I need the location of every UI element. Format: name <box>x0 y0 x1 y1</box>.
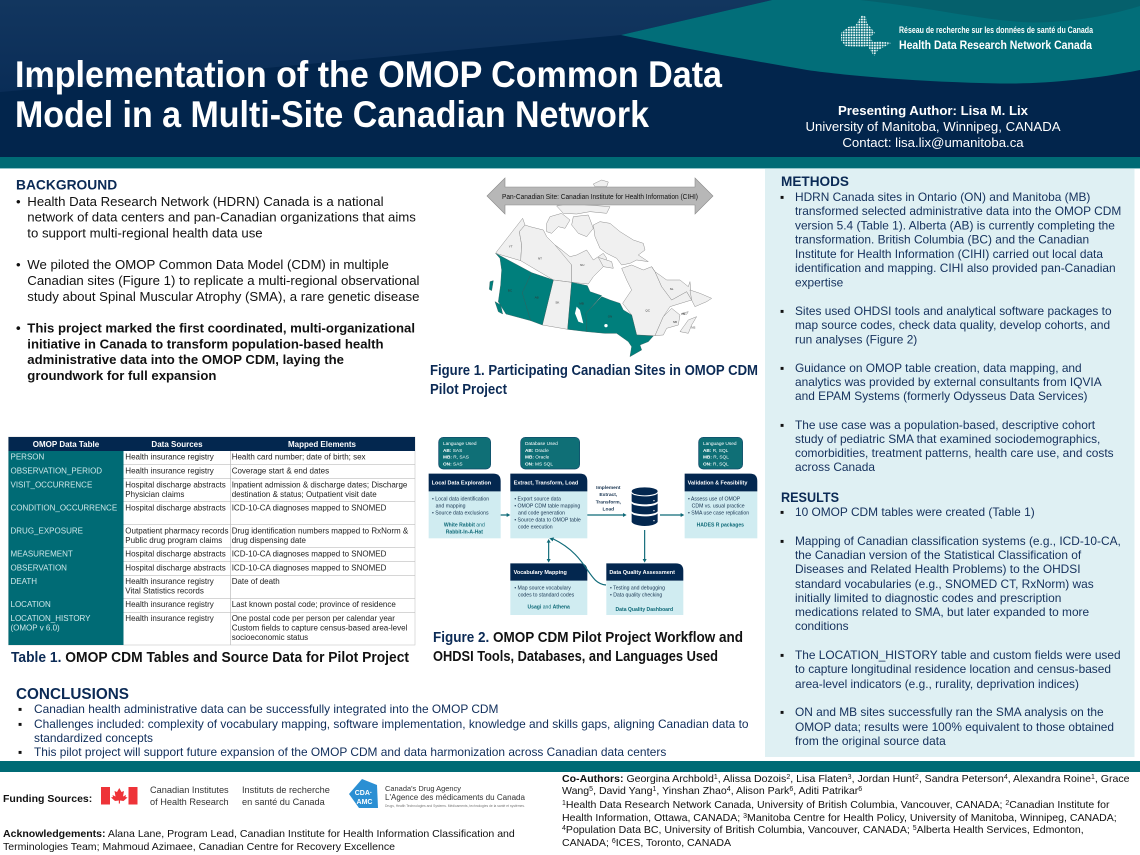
co-authors: , David Yang <box>593 785 653 797</box>
table 1: destination & status; Outpatient visit date <box>232 490 377 499</box>
panel: background <box>16 178 420 383</box>
figure 2: workflow: and code generation <box>518 510 565 516</box>
figure 2: workflow: Data Quality Assessment <box>609 570 675 576</box>
table 1: LOCATION_HISTORY <box>10 614 91 623</box>
figure 2: workflow: Language Used <box>703 441 737 447</box>
funding sources: Instituts de recherche <box>242 785 330 795</box>
table 1: One postal code per person per calendar year <box>232 614 395 623</box>
figure 1: map of Canada: SK <box>555 300 559 304</box>
panel: methods and results: initially limited to diagnostic codes and prescription <box>795 591 1061 605</box>
funding sources: of Health Research <box>150 797 229 807</box>
co-authors: 4 <box>562 825 566 832</box>
table 1: Last known postal code; province of residence <box>232 600 396 609</box>
panel: background: • <box>16 257 21 272</box>
figure 1: map of Canada: NB <box>673 320 677 324</box>
panel: methods and results: OMOP data; results were 100% equivalent to those obtained <box>795 720 1114 734</box>
co-authors: CANADA; <box>562 837 609 849</box>
figure 2: workflow: Database Used <box>525 441 558 447</box>
figure 1: map of Canada: BC <box>508 289 513 293</box>
presenting author: Contact: lisa.lix@umanitoba.ca <box>842 135 1024 150</box>
table 1: VISIT_OCCURRENCE <box>10 480 92 490</box>
panel: methods and results: study of pediatric SMA that examined sociodemographics, <box>795 432 1100 446</box>
table 1: Public drug program claims <box>125 536 222 545</box>
table 1: PERSON <box>10 452 45 462</box>
co-authors: 3 <box>743 813 747 820</box>
panel: methods and results: transformation. British Columbia (BC) and the Canadian <box>795 232 1089 246</box>
figure 2: workflow: Rabbit-In-A-Hat <box>446 529 483 535</box>
panel: methods and results: version 5.4 (Table 1). Alberta (AB) is currently completing the <box>795 218 1115 232</box>
funding sources: Canadian Institutes <box>150 785 229 795</box>
funding sources: Canada's Drug Agency <box>385 784 461 793</box>
co-authors: 5 <box>913 825 917 832</box>
panel: methods and results: The LOCATION_HISTORY table and custom fields were used <box>795 648 1121 662</box>
figure 2: workflow: AB: SAS <box>443 448 462 454</box>
panel: methods and results: Institute for Health Information (CIHI) carried out local data <box>795 247 1103 261</box>
table 1: OBSERVATION_PERIOD <box>10 466 102 476</box>
panel: methods and results: run analyses (Figure 2) <box>795 332 917 346</box>
table 1: socioeconomic status <box>232 633 308 642</box>
table 1 caption: Table 1. OMOP CDM Tables and Source Data for Pilot Project <box>11 649 409 666</box>
co-authors: 1 <box>562 800 566 807</box>
figure 2: workflow: Language Used <box>443 441 477 447</box>
funding sources: L'Agence des médicaments du Canada <box>385 793 526 802</box>
co-authors: , Alexandra Roine <box>1008 773 1091 785</box>
co-authors: 4 <box>727 786 731 793</box>
arrow: pan-Canadian site <box>487 178 713 214</box>
table 1: LOCATION <box>10 600 51 609</box>
figure 2: workflow: • Source data to OMOP table <box>514 517 581 523</box>
acknowledgements <box>3 828 515 853</box>
panel: background: groundwork for full expansion <box>27 368 216 383</box>
table 1: Physician claims <box>125 490 184 499</box>
panel: methods and results: comorbidities, treatment patterns, health care use, and costs <box>795 446 1114 460</box>
panel: methods and results: to capture longitudinal residence location and census-based <box>795 662 1111 676</box>
figure 2: workflow: • Source data exclusions <box>432 510 489 516</box>
panel: methods and results <box>765 169 1134 757</box>
panel: methods and results: RESULTS <box>781 489 839 505</box>
figure 2: workflow: • Data quality checking <box>610 593 662 599</box>
funding sources: Funding Sources: <box>3 793 92 805</box>
figure 2: workflow: Vocabulary Mapping <box>514 570 567 576</box>
figure 2: workflow: ON: MS SQL <box>525 461 553 467</box>
panel: background: network of data centers and pan-Canadian organizations that aims <box>27 210 416 225</box>
figure 1: map of Canada: NL <box>670 287 674 291</box>
figure 2: workflow: Usagi and Athena <box>527 605 570 611</box>
figure 1: map of Canada: NS <box>691 325 695 329</box>
panel: methods and results: conditions <box>795 619 849 633</box>
table 1: Hospital discharge abstracts <box>125 550 226 558</box>
co-authors: , Sandra Peterson <box>919 773 1004 785</box>
panel: methods and results: ▪ <box>780 418 784 432</box>
table 1: Health insurance registry <box>125 577 214 586</box>
table 1: Hospital discharge abstracts <box>125 504 226 512</box>
co-authors: 2 <box>915 774 919 781</box>
funding sources: Drugs, Health Technologies and Systems. Médicaments, technologies de la santé et systèmes. <box>385 804 525 808</box>
panel: methods and results: map source codes, check data quality, develop cohorts, and <box>795 318 1110 332</box>
header banner <box>0 0 1140 169</box>
panel: background: administrative data into the OMOP CDM, laying the <box>27 352 344 367</box>
presenting author <box>805 103 1061 150</box>
figure 1: map of Canada: MB <box>579 301 584 305</box>
panel: background: Health Data Research Network (HDRN) Canada is a national <box>27 194 384 209</box>
panel: conclusions: ▪ <box>18 745 22 759</box>
figure 2: workflow: ON: R, SQL <box>703 461 729 467</box>
figure 2: workflow: AB: Oracle <box>525 448 549 454</box>
panel: background: to support multi-regional health data use <box>27 226 263 241</box>
figure 2: workflow: Local Data Exploration <box>432 481 492 487</box>
table 1: DEATH <box>10 577 37 586</box>
table 1: Data Sources <box>151 440 203 449</box>
panel: methods and results: and EPAM Systems (formerly Odysseus Data Services) <box>795 389 1088 403</box>
figure 1 caption <box>430 362 758 398</box>
panel: methods and results: Sites used OHDSI tools and analytical software packages to <box>795 304 1112 318</box>
figure 2: workflow: HADES R packages <box>697 522 744 528</box>
figure 2 caption: OHDSI Tools, Databases, and Languages Used <box>433 648 718 665</box>
co-authors: 1 <box>714 774 718 781</box>
title: Model in a Multi-Site Canadian Network <box>15 94 649 135</box>
figure 1: map of Canada: NU <box>580 263 584 267</box>
panel: background: BACKGROUND <box>16 178 117 192</box>
panel: methods and results: ▪ <box>780 190 784 204</box>
co-authors: 3 <box>848 774 852 781</box>
icon: Canadian flag <box>101 787 138 804</box>
co-authors: , Jordan Hunt <box>852 773 915 785</box>
acknowledgements: Acknowledgements: Alana Lane, Program Lead, Canadian Institute for Health Information Classification and <box>3 828 515 840</box>
figure 2: workflow: • Assess use of OMOP <box>688 496 741 502</box>
figure 1: map of Canada: NT <box>538 256 542 260</box>
panel: conclusions: standardized concepts <box>34 731 153 745</box>
co-authors: , Yinshan Zhao <box>656 785 727 797</box>
co-authors: Co-Authors: Georgina Archbold <box>562 773 714 785</box>
figure 1: map of Canada: QC <box>645 308 651 312</box>
co-authors: 4 <box>1004 774 1008 781</box>
table 1: Inpatient admission & discharge dates; Discharge <box>232 480 408 490</box>
table 1: Custom fields to capture census-based area-level <box>232 624 408 632</box>
panel: background: initiative in Canada to transform population-based health <box>27 336 384 352</box>
co-authors <box>562 773 1130 849</box>
co-authors: , Aditi Patrikar <box>793 785 859 797</box>
panel: methods and results: ▪ <box>780 505 784 519</box>
table 1: ICD-10-CA diagnoses mapped to SNOMED <box>232 564 387 572</box>
table 1: Health card number; date of birth; sex <box>232 452 366 462</box>
funding sources <box>3 779 526 808</box>
table 1: DRUG_EXPOSURE <box>10 526 83 536</box>
panel: methods and results: across Canada <box>795 460 875 474</box>
panel: background: This project marked the first coordinated, multi-organizational <box>27 321 415 336</box>
table 1: Outpatient pharmacy records <box>125 526 228 536</box>
figure 2: workflow: code execution <box>518 524 553 530</box>
presenting author: University of Manitoba, Winnipeg, CANADA <box>805 119 1061 134</box>
table 1: Health insurance registry <box>125 452 214 462</box>
table 1: Mapped Elements <box>288 440 357 449</box>
funding sources: en santé du Canada <box>242 797 326 807</box>
co-authors: ICES, Toronto, CANADA <box>616 837 732 849</box>
panel: conclusions: Canadian health administrative data can be successfully integrated into the OMOP CDM <box>34 702 498 716</box>
co-authors: 6 <box>612 838 616 845</box>
figure 2: workflow: Data Quality Dashboard <box>616 607 673 613</box>
co-authors: , Alissa Dozois <box>718 773 786 785</box>
table 1: Health insurance registry <box>125 614 214 623</box>
table 1: MEASUREMENT <box>10 550 73 558</box>
table 1: Hospital discharge abstracts <box>125 480 226 490</box>
figure 1: map of Canada: ON <box>608 315 612 319</box>
co-authors: Health Information, Ottawa, CANADA; <box>562 812 740 824</box>
presenting author: Presenting Author: Lisa M. Lix <box>838 103 1029 118</box>
panel: methods and results: ▪ <box>780 304 784 318</box>
panel: methods and results: ▪ <box>780 648 784 662</box>
footer band <box>0 761 1140 772</box>
panel: methods and results: identification and mapping. CIHI also provided pan-Canadian <box>795 261 1116 275</box>
figure 2: workflow: ON: SAS <box>443 461 463 467</box>
panel: methods and results: from the original source data <box>795 734 946 748</box>
icon: CDA-AMC logo: CDA· <box>355 790 372 797</box>
panel: conclusions: ▪ <box>18 702 22 716</box>
table 1: Health insurance registry <box>125 466 214 476</box>
panel: methods and results: the Canadian version of the Statistical Classification of <box>795 548 1082 562</box>
table 1: Hospital discharge abstracts <box>125 564 226 572</box>
figure 2: workflow: • SMA use case replication <box>688 510 749 516</box>
figure 1: map of Canada: PE <box>681 312 685 316</box>
figure 2: workflow: • Testing and debugging <box>610 586 665 592</box>
title <box>15 54 722 135</box>
acknowledgements: Terminologies Team; Mahmoud Azimaee, Canadian Centre for Recovery Excellence <box>3 841 395 853</box>
panel: methods and results: Mapping of Canadian classification systems (e.g., ICD-10-CA, <box>795 534 1121 548</box>
panel: methods and results: ON and MB sites successfully ran the SMA analysis on the <box>795 705 1104 719</box>
co-authors: 1 <box>1091 774 1095 781</box>
panel: methods and results: Guidance on OMOP table creation, data mapping, and <box>795 361 1082 375</box>
figure 2: workflow: White Rabbit and <box>444 522 485 528</box>
co-authors: 6 <box>858 786 862 793</box>
co-authors: Canadian Institute for <box>1009 799 1110 811</box>
co-authors: 6 <box>789 786 793 793</box>
table 1: Health insurance registry <box>125 600 214 609</box>
co-authors: Manitoba Centre for Health Policy, University of Manitoba, Winnipeg, CANADA; <box>747 812 1117 824</box>
figure 2: workflow: Validation & Feasibility <box>688 481 748 487</box>
panel: methods and results: 10 OMOP CDM tables were created (Table 1) <box>795 505 1035 519</box>
figure 1: map of Canada: AB <box>535 296 539 300</box>
logo: Health Data Research Network Canada: Health Data Research Network Canada <box>899 40 1093 52</box>
table 1: ICD-10-CA diagnoses mapped to SNOMED <box>232 504 387 512</box>
figure 2: workflow: codes to standard codes <box>518 593 575 599</box>
figure 2: workflow: CDM vs. usual practice <box>692 503 745 509</box>
co-authors: , Grace <box>1095 773 1130 785</box>
table 1: Drug identification numbers mapped to RxNorm & <box>232 526 409 536</box>
panel: methods and results: expertise <box>795 276 844 290</box>
figure 2: workflow: MB: Oracle <box>525 455 550 461</box>
panel: methods and results: medications related to SMA, but later expanded to more <box>795 605 1090 619</box>
figure 2: workflow: MB: R, SAS <box>443 455 469 461</box>
co-authors: Population Data BC, University of British Columbia, Vancouver, CANADA; <box>566 824 913 836</box>
table 1: OBSERVATION <box>10 564 67 572</box>
panel: conclusions: ▪ <box>18 717 22 731</box>
figure 2: workflow: AB: R, SQL <box>703 448 729 454</box>
panel: background: Canadian sites (Figure 1) to replicate a multi-regional observational <box>27 273 420 288</box>
icon: CDA-AMC logo <box>349 779 378 808</box>
panel: conclusions: CONCLUSIONS <box>16 686 129 703</box>
panel: methods and results: The use case was a population-based, descriptive cohort <box>795 418 1096 432</box>
panel: methods and results: area-level indicators (e.g., rurality, deprivation indices) <box>795 677 1079 691</box>
figure 2: workflow: Extract, Transform, Load <box>514 481 578 487</box>
panel: methods and results: METHODS <box>781 173 849 189</box>
panel: background: study about Spinal Muscular Atrophy (SMA), a rare genetic disease <box>27 289 419 304</box>
panel: background: • <box>16 194 21 209</box>
figure 2: workflow: and mapping <box>436 503 466 509</box>
figure 2: workflow: Load <box>602 506 614 512</box>
panel: methods and results: transformed selected administrative data into the OMOP CDM <box>795 204 1121 218</box>
panel: methods and results: ▪ <box>780 534 784 548</box>
co-authors: 2 <box>786 774 790 781</box>
figure 1: map of Canada: YT <box>509 245 513 249</box>
co-authors: Wang <box>562 785 589 797</box>
arrows <box>501 513 684 585</box>
panel: conclusions: Challenges included: complexity of vocabulary mapping, software implementation, knowledge and skills gaps, aligning Canadian data to <box>34 717 749 731</box>
panel: background: We piloted the OMOP Common Data Model (CDM) in multiple <box>27 257 389 272</box>
figure 2: workflow: Transform, <box>596 499 622 505</box>
panel: methods and results: HDRN Canada sites in Ontario (ON) and Manitoba (MB) <box>795 190 1090 204</box>
table 1: Vital Statistics records <box>125 586 204 596</box>
panel: methods and results: Diseases and Related Health Problems) to the OHDSI <box>795 562 1081 576</box>
co-authors: 5 <box>589 786 593 793</box>
co-authors: , Alison Park <box>731 785 790 797</box>
co-authors: 2 <box>1005 800 1009 807</box>
table 1: ICD-10-CA diagnoses mapped to SNOMED <box>232 550 387 558</box>
figure 2: workflow <box>429 437 757 615</box>
figure 2: workflow: Extract, <box>599 492 618 498</box>
table 1: OMOP Data Table <box>33 440 100 449</box>
co-authors: 1 <box>652 786 656 793</box>
panel: methods and results: ▪ <box>780 361 784 375</box>
arrow: pan-Canadian site: Pan-Canadian Site: Canadian Institute for Health Information (CIHI) <box>502 194 698 201</box>
logo: Health Data Research Network Canada <box>841 15 1094 56</box>
table 1: Date of death <box>232 577 280 586</box>
table 1: Coverage start & end dates <box>232 466 329 476</box>
icon: CDA-AMC logo: AMC <box>357 799 372 806</box>
table 1: (OMOP v 6.0) <box>10 624 60 632</box>
table 1 <box>8 437 415 645</box>
panel: conclusions: This pilot project will support future expansion of the OMOP CDM and data harmonization across Canadian data centers <box>34 745 666 759</box>
figure 2: workflow: MB: R, SQL <box>703 455 729 461</box>
figure 1: map of Canada <box>489 180 712 357</box>
panel: conclusions <box>16 686 749 759</box>
table 1: drug dispensing date <box>232 536 307 545</box>
panel: methods and results: standard vocabularies (e.g., SNOMED CT, RxNorm) was <box>795 577 1094 591</box>
figure 1 caption: Figure 1. Participating Canadian Sites in OMOP CDM <box>430 362 758 379</box>
co-authors: Health Data Research Network Canada, University of British Columbia, Vancouver, CANADA; <box>566 799 1005 811</box>
panel: methods and results: analytics was provided by external consultants from IQVIA <box>795 375 1102 389</box>
table 1: CONDITION_OCCURRENCE <box>10 504 117 512</box>
figure 1 caption: Pilot Project <box>430 381 507 398</box>
figure 2 caption <box>433 629 743 665</box>
figure 2: workflow: • Map source vocabulary <box>514 586 571 592</box>
figure 2: workflow: • OMOP CDM table mapping <box>514 503 580 509</box>
figure 2: workflow: • Local data identification <box>432 496 489 502</box>
co-authors: Alberta Health Services, Edmonton, <box>917 824 1084 836</box>
panel: methods and results: ▪ <box>780 705 784 719</box>
figure 2: workflow: Implement <box>596 485 621 491</box>
panel: background: • <box>16 321 21 336</box>
icon: database <box>632 487 658 526</box>
figure 2: workflow: • Export source data <box>514 496 561 502</box>
figure 2 caption: Figure 2. OMOP CDM Pilot Project Workflow and <box>433 629 743 646</box>
title: Implementation of the OMOP Common Data <box>15 54 722 95</box>
co-authors: , Lisa Flaten <box>790 773 848 785</box>
